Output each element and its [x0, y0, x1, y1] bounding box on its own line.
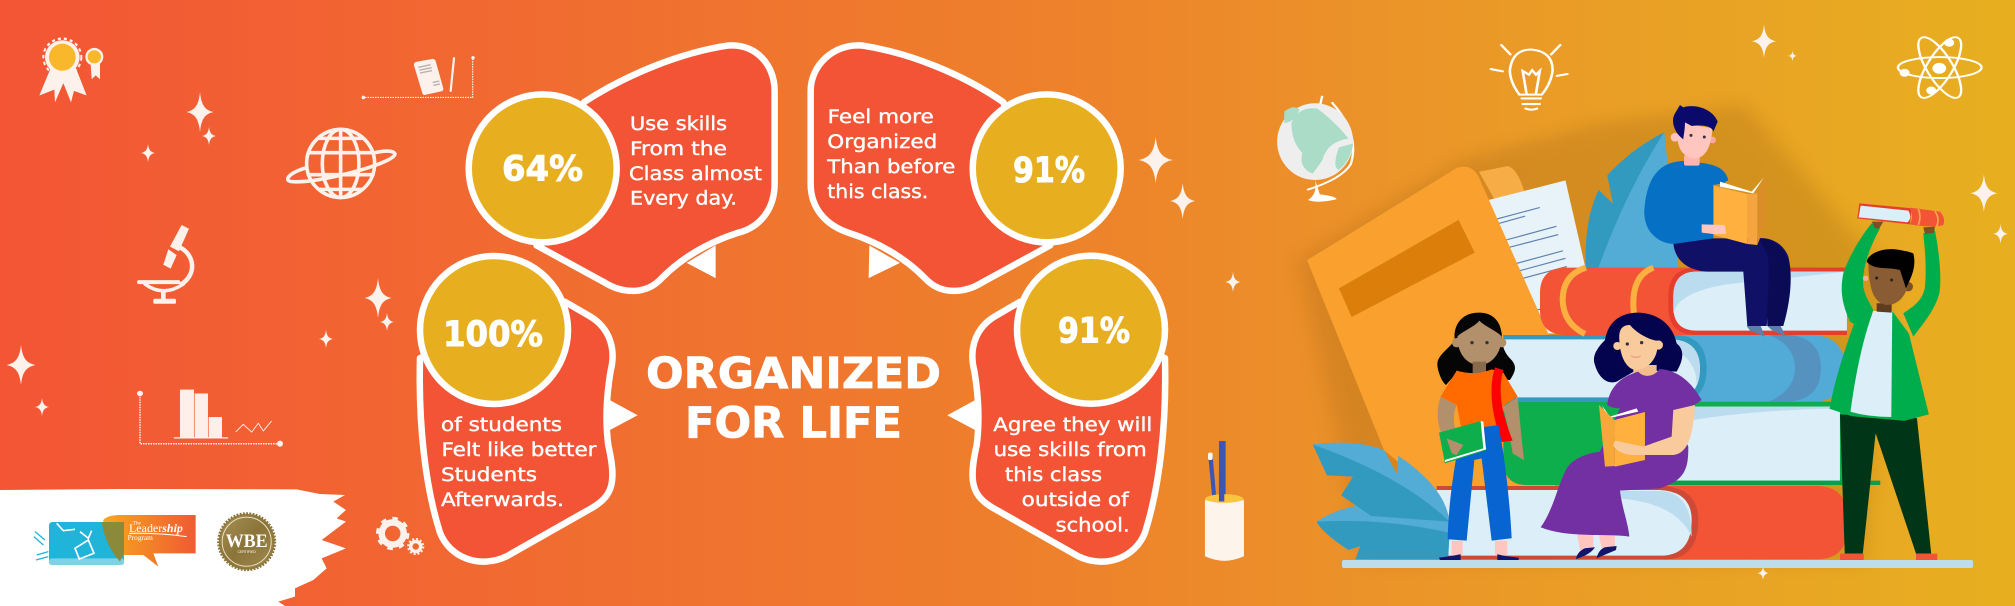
logo: The Leadership Program: The [133, 520, 142, 526]
logo: The Leadership Program: Program [128, 533, 153, 542]
panel: 91% agree bubble: 91% [1058, 312, 1130, 352]
woman reading [1541, 313, 1702, 559]
logo: The Leadership Program: Leadership [129, 521, 183, 535]
man holding book [1830, 203, 1944, 560]
panel: 100% bubble: Afterwards. [441, 490, 564, 511]
sparkles: left side [6, 92, 394, 416]
panel: 91% agree bubble: Agree they will [993, 415, 1152, 436]
sparkles: centre right [1139, 137, 1240, 292]
icon: microscope [139, 225, 192, 304]
panel: 91% organized bubble: Organized [827, 132, 937, 153]
panel: 91% agree bubble: this class [1005, 465, 1102, 486]
panel: 64% bubble: From the [630, 139, 727, 160]
icon: planet globe [288, 129, 395, 198]
panel: 91% agree bubble: outside of [1022, 490, 1129, 511]
panel: 64% bubble [469, 45, 775, 291]
panel: 64% bubble: 64% [502, 150, 583, 190]
panel: 100% bubble: Students [441, 465, 537, 486]
panel: 100% bubble [420, 256, 638, 562]
leaf: front left [1313, 443, 1450, 559]
panel: 91% agree bubble: use skills from [994, 440, 1147, 461]
panel: 64% bubble: Every day. [630, 189, 737, 210]
panel: 91% organized bubble: Than before [826, 157, 955, 178]
title: FOR LIFE [685, 398, 902, 448]
panel: 100% bubble: of students [441, 415, 562, 436]
panel: 91% organized bubble: this class. [827, 182, 928, 203]
logo: WBE seal: CERTIFIED [237, 550, 256, 554]
title: ORGANIZED [646, 349, 941, 399]
icon: document and pencil [362, 56, 475, 99]
panel: 100% bubble: Felt like better [442, 440, 597, 461]
panel: 91% organized bubble: 91% [1013, 151, 1085, 191]
book stack [1437, 268, 1880, 559]
panel: 91% agree bubble: school. [1056, 515, 1130, 536]
panel: 64% bubble: Class almost [629, 164, 762, 185]
background objects [1277, 25, 2008, 580]
illustration: students and books [1277, 25, 2008, 580]
panel: 91% agree bubble [947, 256, 1165, 562]
icon: award ribbons [39, 39, 103, 102]
panel: 91% organized bubble [811, 45, 1121, 291]
white brush strip [0, 489, 346, 606]
shelf [1342, 560, 1973, 568]
icon: bar chart [137, 390, 283, 447]
icon: gears [378, 518, 423, 554]
logo: The Leadership Program [34, 515, 196, 567]
panel: 91% organized bubble: Feel more [828, 107, 934, 128]
panel: 100% bubble: 100% [443, 315, 543, 355]
title [646, 349, 941, 448]
panel: 64% bubble: Use skills [630, 114, 727, 135]
reader on top [1644, 105, 1791, 337]
logo: WBE seal: WBE [226, 531, 268, 552]
girl with bag [1437, 313, 1524, 560]
icon: pen cup [1205, 441, 1244, 561]
logo: WBE seal [219, 514, 275, 570]
